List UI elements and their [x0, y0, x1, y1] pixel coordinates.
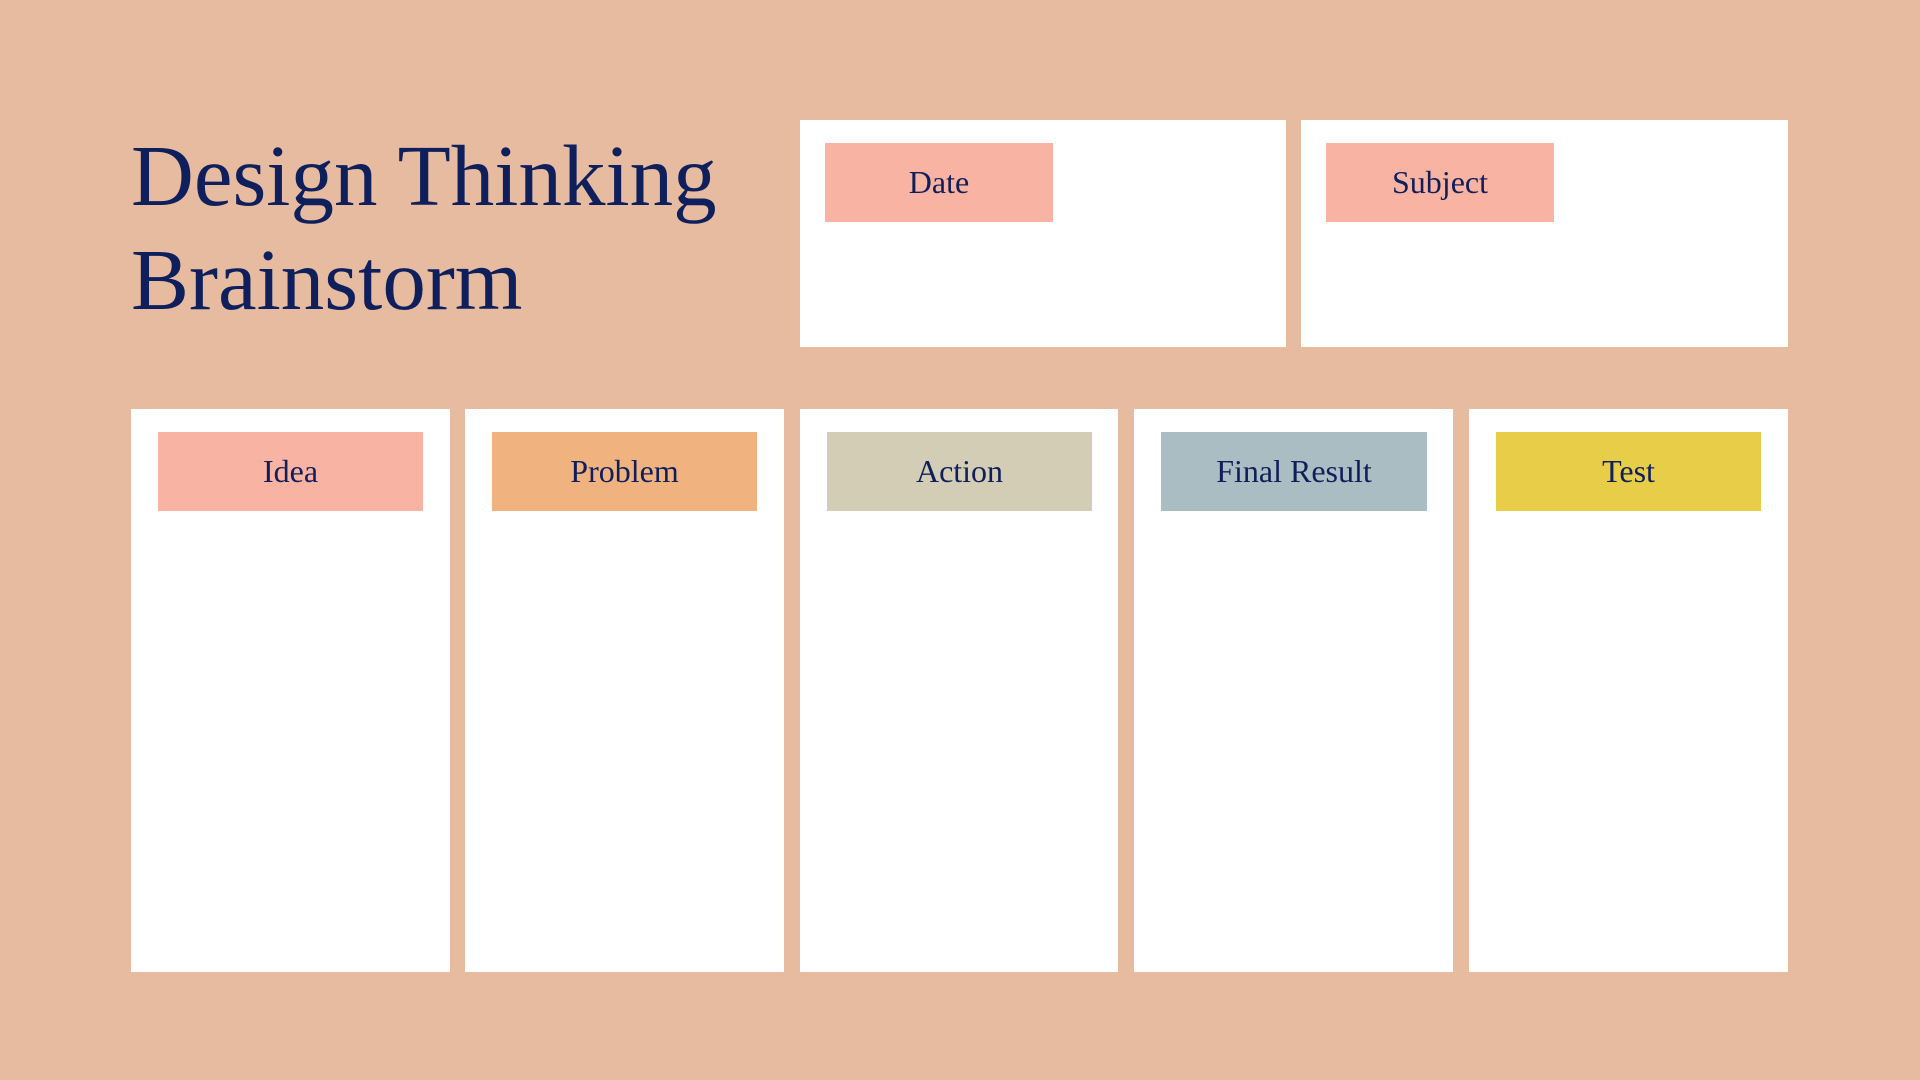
title: Brainstorm	[131, 231, 522, 328]
panel: final result	[1134, 409, 1453, 972]
label: test	[1496, 432, 1761, 511]
panel: action	[800, 409, 1118, 972]
label: problem: Problem	[570, 453, 679, 489]
panel: test	[1469, 409, 1788, 972]
title: Design Thinking	[131, 127, 717, 224]
title	[131, 127, 717, 328]
panel: idea	[131, 409, 450, 972]
label: idea: Idea	[263, 453, 318, 489]
panel: date	[800, 120, 1286, 347]
panel: subject	[1301, 120, 1788, 347]
label: test: Test	[1602, 453, 1655, 489]
panel: problem	[465, 409, 784, 972]
label: action	[827, 432, 1092, 511]
label: date: Date	[909, 164, 969, 200]
label: idea	[158, 432, 423, 511]
label: problem	[492, 432, 757, 511]
label: subject: Subject	[1392, 164, 1488, 200]
label: subject	[1326, 143, 1554, 222]
label: final result	[1161, 432, 1427, 511]
label: final result: Final Result	[1216, 453, 1372, 489]
label: date	[825, 143, 1053, 222]
label: action: Action	[916, 453, 1003, 489]
